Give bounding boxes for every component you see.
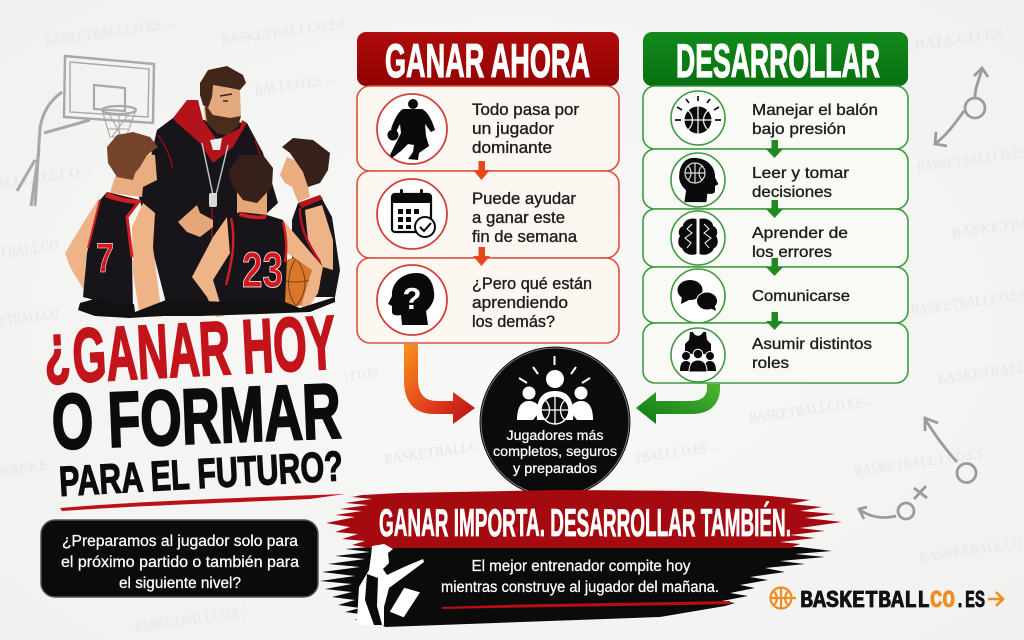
player 7: 7 [96, 234, 114, 281]
ground brush [78, 297, 335, 318]
watermarks: BALLCO.ES→ [253, 72, 335, 99]
icon: coach silhouette with clipboard [357, 544, 424, 625]
watermarks: BASKETBALLCO.ES→ [748, 394, 874, 427]
player right [280, 138, 340, 297]
player 23: 23 [242, 242, 283, 298]
icon: players around ball [517, 356, 593, 424]
row: qué están aprendiendo: ¿Pero qué están [472, 275, 592, 293]
row: asumir distintos roles: Asumir distintos [752, 336, 872, 353]
title: ¿ [42, 309, 72, 388]
banner: black brush strip [320, 547, 832, 627]
watermarks: ETBALLCO [0, 306, 60, 330]
watermarks: TBALLCO [0, 238, 60, 262]
row: leer y tomar decisiones [643, 149, 908, 209]
row: ganar este fin de semana: a ganar este [472, 209, 565, 227]
row: jugador dominante: un jugador [472, 120, 555, 138]
icon: orange ball [770, 588, 796, 608]
title: GANAR HOY [70, 300, 338, 399]
callout: question box: el próximo partido o también para [61, 554, 299, 571]
row: ganar este fin de semana: Puede ayudar [472, 190, 577, 208]
icon: brain [678, 218, 718, 255]
icon: head with ball [679, 158, 718, 202]
icon: speech bubbles [678, 280, 718, 311]
coach [138, 66, 278, 307]
watermarks: BASKETBALL LCO.ES [853, 446, 984, 480]
arrow: row 1 to 2 [473, 161, 490, 180]
arrow: row 4 to 5 [766, 312, 783, 330]
icon: jersey and team [680, 332, 716, 372]
icon: dribbling player [388, 99, 435, 160]
row: ganar este fin de semana [357, 171, 619, 258]
icon: orange arrow [988, 592, 1003, 606]
row: aprender de los errores [643, 209, 908, 267]
banner: red brush strip [326, 490, 842, 548]
banner: black brush strip: mientras construye al jugador del mañana. [441, 579, 719, 596]
callout: question box: ¿Preparamos al jugador solo para [62, 533, 298, 550]
row: comunicarse [643, 267, 908, 323]
row: leer y tomar decisiones: decisiones [752, 184, 832, 201]
row: jugador dominante [357, 86, 619, 171]
row: manejar el balón [643, 86, 908, 149]
arrow: row 2 to 3 [473, 247, 490, 266]
row: qué están aprendiendo: los demás? [472, 313, 555, 331]
player 7 [65, 132, 162, 317]
heading: ganar ahora [357, 32, 619, 87]
callout: question box [41, 520, 318, 597]
title: O FORMAR [50, 366, 342, 466]
row: aprender de los errores: Aprender de [752, 225, 848, 242]
banner: black brush strip: El mejor entrenador compite hoy [472, 558, 691, 575]
row: jugador dominante: dominante [472, 139, 552, 157]
basketball [272, 258, 320, 306]
row: asumir distintos roles: roles [752, 355, 789, 372]
play diagram: top right [935, 68, 988, 146]
row: comunicarse: Comunicarse [752, 288, 850, 305]
watermarks: BASKETBALLCO.ES [220, 16, 346, 49]
icon: head with question mark: ? [403, 281, 421, 316]
row: jugador dominante: Todo pasa por [472, 101, 580, 119]
arrow: row 3 to 4 [766, 258, 783, 276]
watermarks: BALLCO.ES [913, 26, 1005, 54]
logo: basketballco.es: BASKETBALL [800, 588, 930, 615]
callout: question box: el siguiente nivel? [119, 575, 241, 592]
row: aprender de los errores: los errores [752, 244, 832, 261]
title underline brush stroke [60, 494, 345, 511]
icon: basketball hoop sketch [17, 56, 154, 206]
icon: ball with rays [675, 96, 721, 134]
result circle: Jugadores más [506, 428, 604, 443]
player 23 [192, 155, 323, 317]
result circle: completos, seguros [493, 444, 617, 459]
watermarks: H.LLALLCO→ [0, 163, 95, 192]
row: manejar el balón: bajo presión [752, 121, 846, 138]
heading: ganar ahora: GANAR AHORA [385, 34, 590, 87]
row: ganar este fin de semana: fin de semana [472, 228, 578, 246]
logo: basketballco.es: CO [930, 588, 955, 615]
arrow: row 1 to 2 [766, 140, 783, 158]
illustration: coach and three young players [65, 66, 340, 318]
watermarks: LCO.ES→ [343, 364, 390, 386]
play diagram: bottom right [859, 418, 976, 519]
result circle [479, 346, 631, 498]
arrow: row 2 to 3 [766, 200, 783, 218]
row: asumir distintos roles [643, 323, 908, 383]
panel: desarrollar [643, 32, 908, 383]
result circle: y preparados [513, 461, 597, 476]
watermarks: TBALLCO.ES→ [633, 439, 720, 467]
row: qué están aprendiendo: aprendiendo [472, 294, 568, 312]
arrow: desarrollar to result [636, 384, 720, 424]
logo: basketballco.es: .ES [955, 588, 985, 615]
heading: desarrollar [643, 32, 908, 87]
watermarks: BASKETBALLCO.ES→ [43, 16, 174, 50]
row: qué están aprendiendo [357, 258, 619, 343]
row: manejar el balón: Manejar el balón [752, 102, 878, 119]
title: PARA EL FUTURO? [58, 442, 344, 505]
title [42, 300, 344, 505]
watermarks: BASKETBALLCO.ES→ [133, 603, 259, 636]
row: leer y tomar decisiones: Leer y tomar [752, 165, 850, 182]
arrow: ganar ahora to result [404, 344, 475, 424]
icon: head with question mark [388, 273, 434, 325]
icon: calendar with check [392, 189, 435, 237]
panel: ganar ahora [357, 32, 619, 343]
logo: basketballco.es [770, 588, 1003, 615]
watermarks: BASKETBALLC [383, 439, 480, 468]
